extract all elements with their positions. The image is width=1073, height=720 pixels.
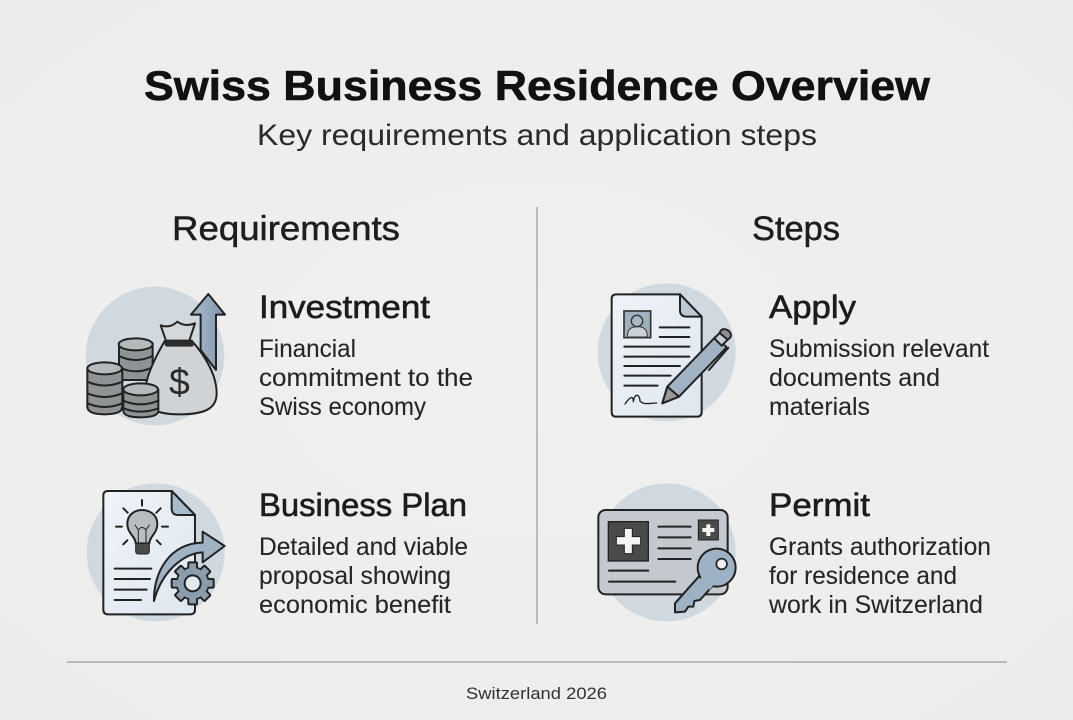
item heading: permit: Permit bbox=[769, 487, 870, 523]
item text: permit: work in Switzerland bbox=[768, 591, 983, 619]
heading: requirements: Requirements bbox=[172, 210, 400, 248]
item text: business plan: Detailed and viable bbox=[259, 533, 468, 561]
item text: investment bbox=[259, 335, 473, 421]
icon: document with light bulb, arrow and gear bbox=[87, 483, 225, 621]
item heading: investment: Investment bbox=[259, 289, 430, 325]
panel: requirements bbox=[86, 210, 473, 621]
item text: business plan: proposal showing bbox=[259, 562, 451, 590]
item text: investment: Swiss economy bbox=[259, 393, 426, 421]
subtitle: Key requirements and application steps bbox=[257, 119, 817, 152]
icon: coins and money bag with rising arrow: $ bbox=[169, 360, 190, 402]
item text: investment: commitment to the bbox=[259, 364, 473, 392]
icon: application form with pen bbox=[598, 283, 736, 421]
item text: business plan: economic benefit bbox=[259, 591, 451, 619]
icon: coins and money bag with rising arrow bbox=[86, 287, 225, 425]
item heading: business plan: Business Plan bbox=[259, 487, 467, 523]
item text: permit: for residence and bbox=[769, 562, 957, 590]
item text: apply: Submission relevant bbox=[769, 335, 989, 363]
item text: business plan bbox=[259, 533, 468, 619]
panel: steps bbox=[598, 210, 991, 621]
item: business plan bbox=[87, 483, 468, 621]
item: investment bbox=[86, 287, 473, 425]
item text: permit: Grants authorization bbox=[769, 533, 991, 561]
item text: permit bbox=[768, 533, 991, 619]
item heading: apply: Apply bbox=[769, 289, 856, 325]
heading: steps: Steps bbox=[752, 210, 840, 248]
item text: apply: documents and bbox=[769, 364, 940, 392]
item text: apply: materials bbox=[769, 393, 870, 421]
item text: apply bbox=[769, 335, 989, 421]
footer: Switzerland 2026 bbox=[466, 685, 607, 703]
item text: investment: Financial bbox=[259, 335, 356, 363]
item: permit bbox=[598, 483, 991, 621]
icon: permit card with key bbox=[598, 483, 736, 621]
title: Swiss Business Residence Overview bbox=[144, 62, 930, 109]
item: apply bbox=[598, 283, 989, 421]
